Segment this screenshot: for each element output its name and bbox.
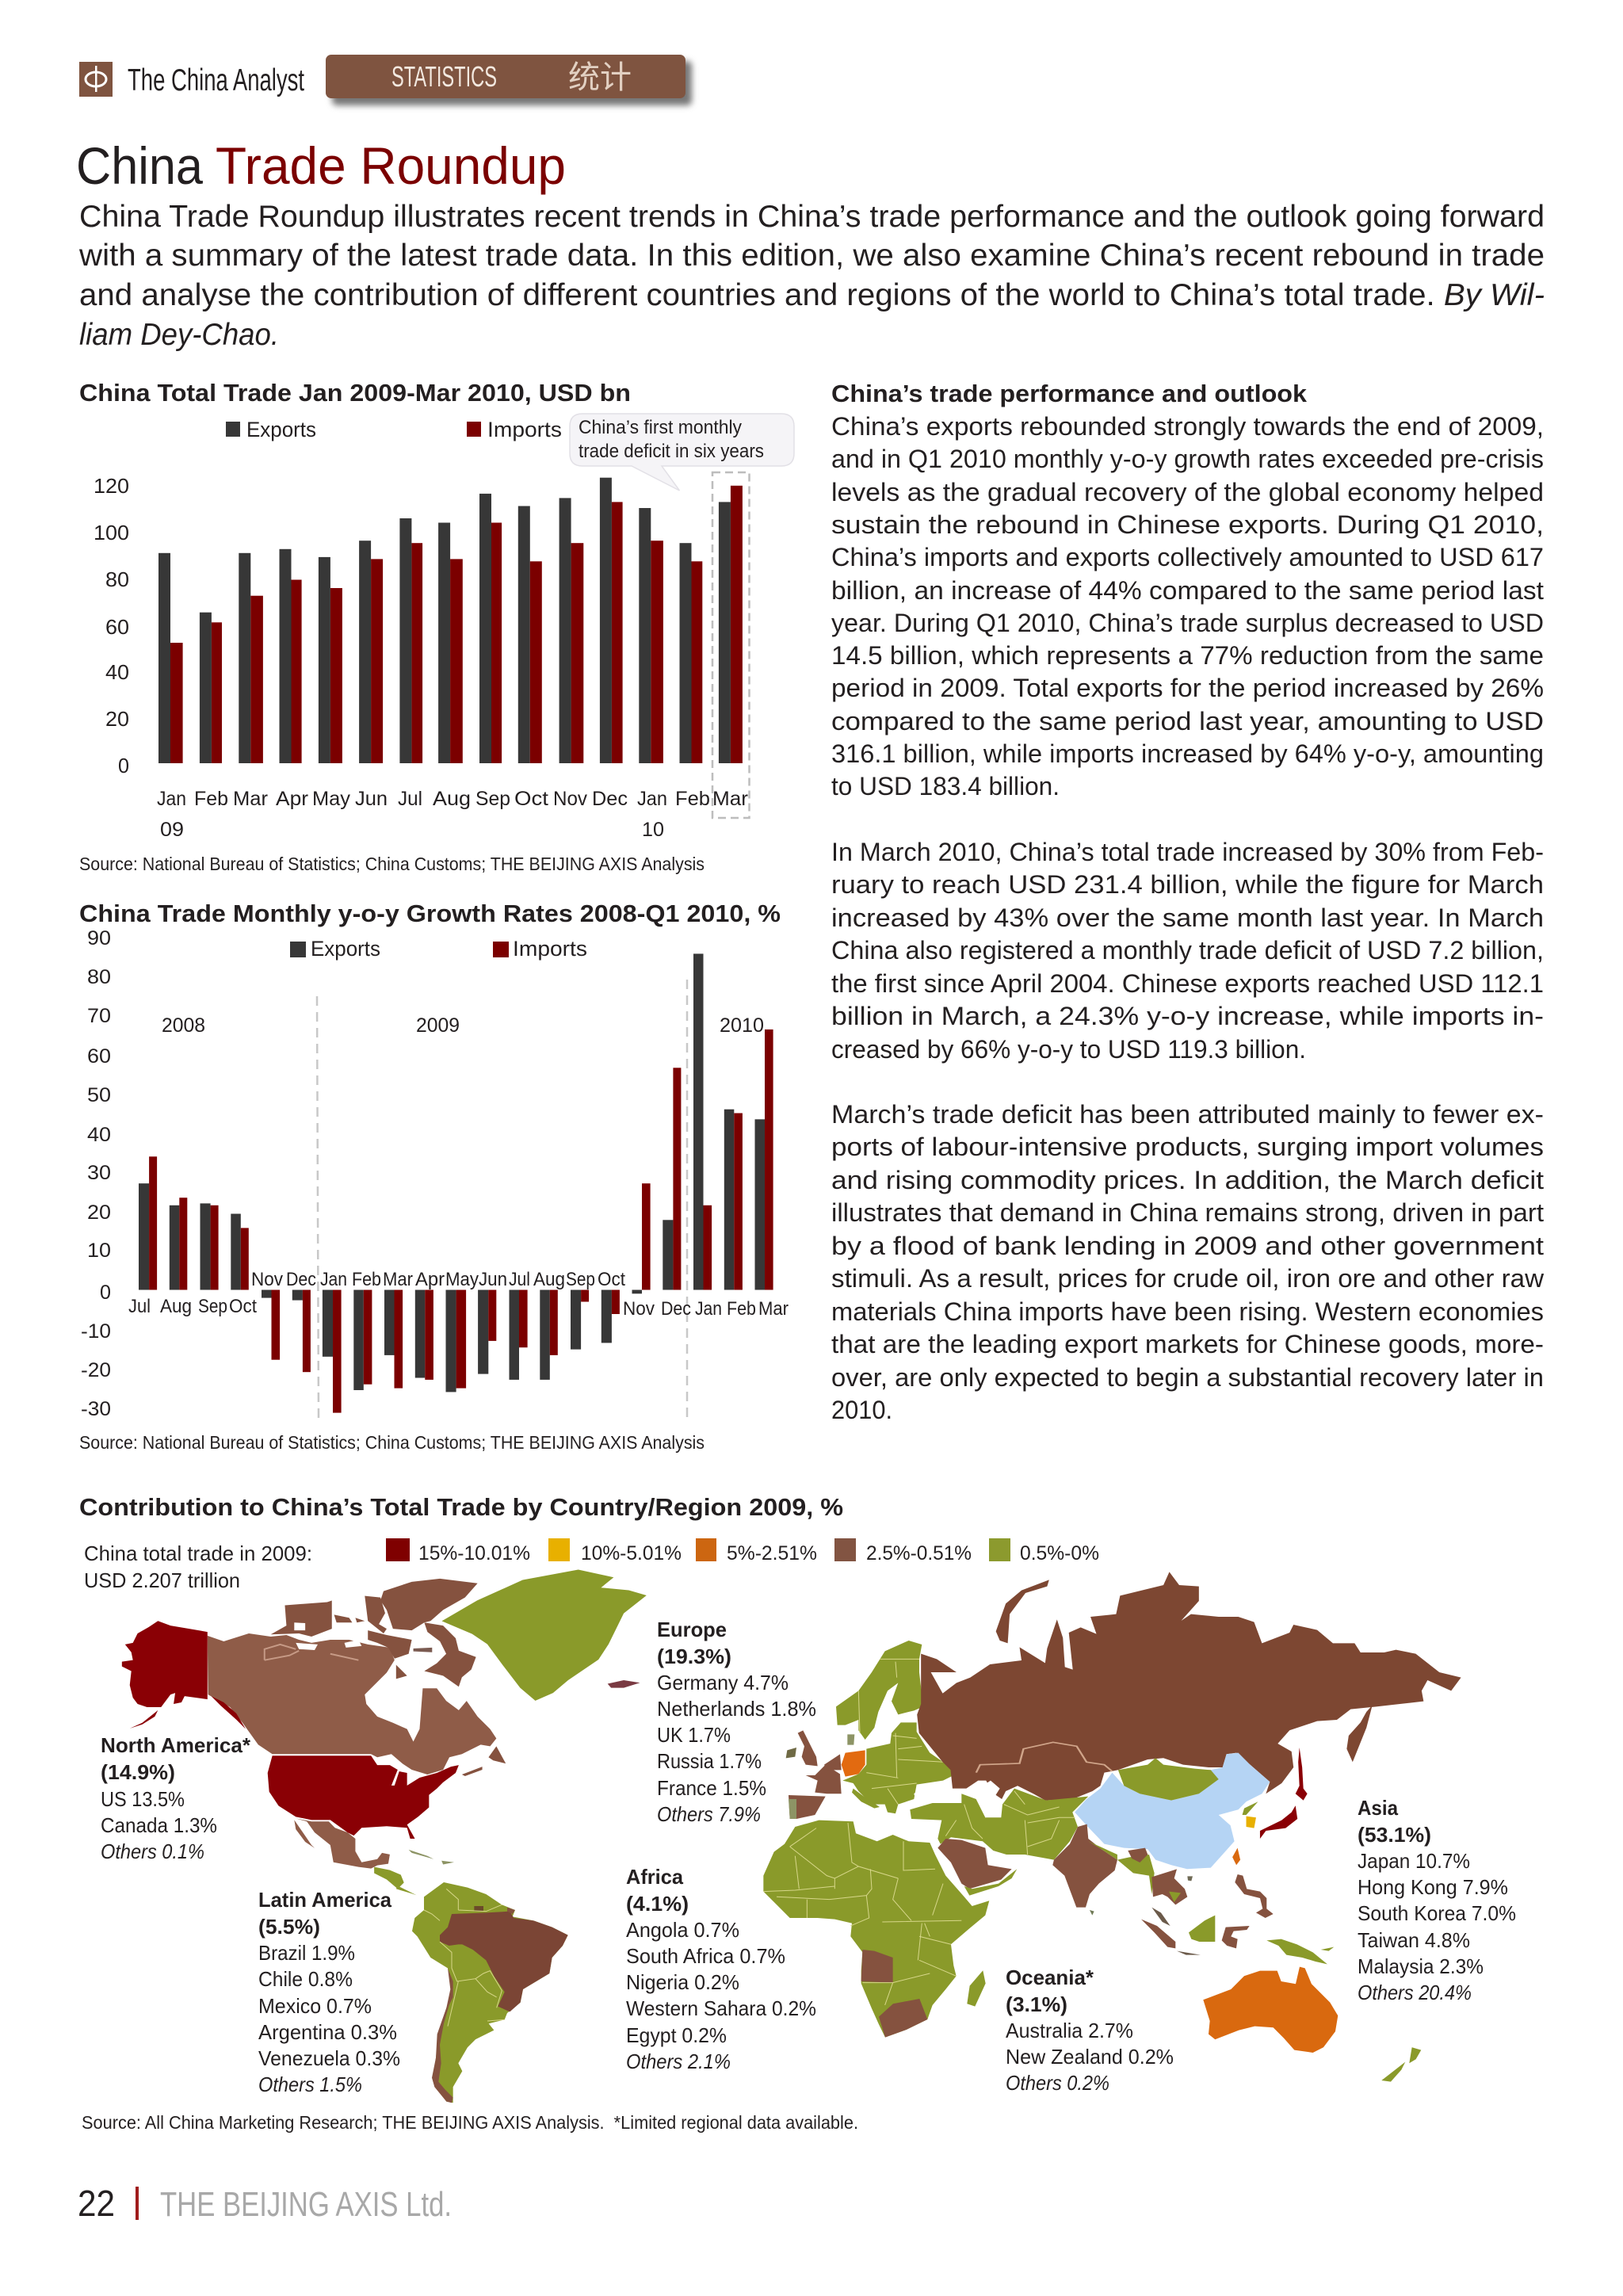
growth month labels: May: [445, 1269, 479, 1290]
x axis labels: Aug: [433, 788, 471, 810]
x axis labels: Mar: [712, 788, 748, 810]
map legend: 5%-2.51%: [727, 1542, 817, 1564]
growth month labels: Dec: [286, 1269, 316, 1290]
x axis labels: Jun: [355, 788, 388, 810]
article paragraph 1: billion, an increase of 44% compared to the same period last: [831, 576, 1544, 605]
chart legend: [226, 418, 562, 441]
growth month labels: Sep: [566, 1269, 595, 1290]
label: Europe: [657, 1618, 816, 1826]
article paragraph 1: 14.5 billion, which represents a 77% reduction from the same: [831, 641, 1544, 670]
y axis labels: 0: [118, 754, 129, 777]
source note: total trade: Source: National Bureau of Statistics; China Customs; THE BEIJING AXIS Analysis: [79, 854, 705, 874]
growth y axis labels: -10: [81, 1320, 111, 1343]
intro text: [78, 200, 1545, 352]
label: Africa: [626, 1865, 816, 2073]
growth month labels: Mar: [383, 1269, 413, 1290]
growth month labels: Oct: [229, 1296, 257, 1317]
label: Africa: (4.1%): [626, 1892, 689, 1916]
label: Asia: (53.1%): [1358, 1823, 1431, 1847]
growth month labels: Jul: [509, 1269, 530, 1290]
label: Europe: Germany 4.7%: [657, 1671, 789, 1694]
map: South America: [412, 1882, 568, 2103]
label: North America: [101, 1733, 251, 1863]
growth month labels: Jan: [695, 1298, 722, 1320]
label: Europe: Europe: [657, 1618, 727, 1641]
x axis labels: Mar: [233, 788, 268, 810]
growth y axis labels: 0: [100, 1282, 111, 1304]
label: North America: Others 0.1%: [101, 1839, 204, 1863]
article paragraph 3: stimuli. As a result, prices for crude oil, iron ore and other raw: [831, 1264, 1545, 1293]
label: North America: US 13.5%: [101, 1787, 185, 1811]
article paragraph 3: [831, 1100, 1545, 1424]
x axis labels: Feb: [675, 788, 710, 810]
source note: growth rates: Source: National Bureau of Statistics; China Customs; THE BEIJING AXIS Analysis: [79, 1432, 705, 1453]
section tab: statistics: [326, 55, 692, 105]
label: Latin America: Brazil 1.9%: [258, 1941, 355, 1965]
map: North America: [122, 1579, 506, 1895]
header: logo and magazine name: [79, 62, 304, 97]
article paragraph 1: [831, 412, 1544, 800]
intro text: liam Dey-Chao.: [79, 318, 279, 352]
label: North America: Canada 1.3%: [101, 1813, 217, 1837]
article paragraph 3: over, are only expected to begin a substantial recovery later in: [831, 1363, 1544, 1392]
x axis labels: Jan: [637, 788, 667, 810]
chart heading: total trade: China Total Trade Jan 2009-Mar 2010, USD bn: [79, 379, 631, 407]
y axis labels: 120: [94, 474, 129, 498]
intro text: China Trade Roundup illustrates recent trends in China’s trade performance and the outlook going forward: [79, 200, 1545, 234]
growth month labels: Jul: [128, 1296, 151, 1317]
article paragraph 3: 2010.: [831, 1396, 892, 1424]
article paragraph 2: the first since April 2004. Chinese exports reached USD 112.1: [831, 969, 1544, 998]
callout: first trade deficit: China’s first monthly: [579, 417, 742, 438]
x axis labels: May: [312, 788, 351, 810]
map legend: [386, 1538, 1099, 1564]
growth month labels: Aug: [160, 1296, 192, 1317]
x axis labels: Nov: [553, 788, 587, 810]
map: Southeast Asia and Oceania: [1117, 1848, 1421, 2082]
article paragraph 3: by a flood of bank lending in 2009 and other government: [831, 1232, 1544, 1260]
label: Africa: Angola 0.7%: [626, 1918, 739, 1942]
section tab: statistics: STATISTICS: [391, 60, 497, 93]
growth y axis labels: 50: [87, 1084, 111, 1106]
world map: [122, 1570, 1461, 2103]
label: Africa: Nigeria 0.2%: [626, 1970, 739, 1994]
year dividers: [317, 980, 687, 1419]
total trade note: [84, 1541, 312, 1592]
article paragraph 1: China’s exports rebounded strongly towards the end of 2009,: [831, 412, 1544, 441]
growth y axis labels: [81, 927, 111, 1420]
label: Latin America: Venezuela 0.3%: [258, 2046, 400, 2070]
label: Europe: Netherlands 1.8%: [657, 1697, 816, 1721]
growth y axis labels: 70: [87, 1005, 111, 1027]
label: Asia: Japan 10.7%: [1358, 1849, 1470, 1873]
growth month labels: [128, 1269, 789, 1320]
year labels: 2009: [416, 1014, 460, 1037]
label: Asia: Others 20.4%: [1358, 1981, 1472, 2004]
article paragraph 1: year. During Q1 2010, China’s trade surplus decreased to USD: [831, 609, 1544, 637]
label: Latin America: [258, 1888, 400, 2096]
label: Oceania: [1006, 1966, 1174, 2095]
total trade note: USD 2.207 trillion: [84, 1568, 240, 1592]
dashed highlight box: March 2010: [712, 472, 750, 818]
article paragraph 3: and rising commodity prices. In addition, the March deficit: [831, 1166, 1544, 1194]
map legend: 0.5%-0%: [1020, 1542, 1099, 1564]
article paragraph 1: and in Q1 2010 monthly y-o-y growth rates exceeded pre-crisis: [831, 445, 1544, 473]
y axis labels: 20: [105, 707, 129, 731]
label: Europe: France 1.5%: [657, 1776, 766, 1800]
growth month labels: Apr: [415, 1269, 445, 1290]
article paragraph 2: [831, 838, 1544, 1064]
article paragraph 3: March’s trade deficit has been attributed mainly to fewer ex-: [831, 1100, 1544, 1129]
label: Europe: Russia 1.7%: [657, 1749, 762, 1773]
label: Oceania: New Zealand 0.2%: [1006, 2045, 1174, 2069]
x axis labels: Sep: [475, 788, 510, 810]
growth month labels: Feb: [727, 1298, 756, 1320]
label: Oceania: Australia 2.7%: [1006, 2019, 1133, 2042]
y axis labels: 100: [94, 521, 129, 544]
label: Asia: Asia: [1358, 1796, 1398, 1820]
chart legend: Exports: [246, 418, 316, 441]
article paragraph 2: ruary to reach USD 231.4 billion, while the figure for March: [831, 870, 1544, 899]
label: Oceania: Oceania*: [1006, 1966, 1094, 1989]
growth y axis labels: 30: [87, 1162, 111, 1184]
section tab: statistics: 统计: [568, 60, 632, 95]
x axis labels: 10: [642, 819, 664, 841]
y axis labels: [94, 474, 129, 777]
footer: 22: [78, 2183, 115, 2224]
title: [76, 136, 566, 195]
chart heading: growth rates: China Trade Monthly y-o-y Growth Rates 2008-Q1 2010, %: [79, 900, 781, 927]
label: Asia: Hong Kong 7.9%: [1358, 1875, 1508, 1899]
growth y axis labels: 90: [87, 927, 111, 949]
map: Russia and Central Asia: [917, 1572, 1461, 1869]
bar chart: total trade: [94, 414, 794, 841]
map legend: 15%-10.01%: [418, 1542, 530, 1564]
article paragraph 1: levels as the gradual recovery of the global economy helped: [831, 478, 1544, 506]
y axis labels: 40: [105, 660, 129, 684]
footer: [78, 2183, 452, 2224]
growth month labels: Mar: [758, 1298, 789, 1320]
intro text: with a summary of the latest trade data. In this edition, we also examine China’s recent rebound in trade: [78, 239, 1545, 273]
map: Middle East and South Asia: [910, 1781, 1117, 1916]
label: Latin America: Latin America: [258, 1888, 392, 1912]
x axis labels: Jul: [398, 788, 422, 810]
article paragraph 1: sustain the rebound in Chinese exports. During Q1 2010,: [831, 510, 1544, 539]
year labels: [162, 1014, 764, 1037]
growth legend: Imports: [513, 937, 587, 961]
growth y axis labels: 20: [87, 1201, 111, 1224]
map legend: 2.5%-0.51%: [866, 1542, 972, 1564]
growth y axis labels: -30: [81, 1398, 111, 1420]
x axis labels: Apr: [276, 788, 308, 810]
x axis labels: Feb: [194, 788, 228, 810]
growth month labels: Feb: [352, 1269, 381, 1290]
year labels: 2010: [720, 1014, 764, 1037]
label: Asia: South Korea 7.0%: [1358, 1901, 1516, 1925]
label: North America: (14.9%): [101, 1760, 175, 1784]
map heading: Contribution to China’s Total Trade by Country/Region 2009, %: [79, 1493, 843, 1521]
growth month labels: Jun: [479, 1269, 507, 1290]
growth month labels: Nov: [251, 1269, 283, 1290]
label: Latin America: Chile 0.8%: [258, 1967, 353, 1991]
label: Asia: Taiwan 4.8%: [1358, 1928, 1470, 1952]
growth legend: Exports: [311, 937, 380, 961]
article paragraph 1: to USD 183.4 billion.: [831, 772, 1060, 800]
growth y axis labels: -20: [81, 1359, 111, 1381]
y axis labels: 80: [105, 567, 129, 591]
growth month labels: Oct: [598, 1269, 625, 1290]
year labels: 2008: [162, 1014, 205, 1037]
footer: THE BEIJING AXIS Ltd.: [160, 2185, 452, 2224]
callout: first trade deficit: trade deficit in six years: [579, 441, 764, 462]
source note: map: Source: All China Marketing Research; THE BEIJING AXIS Analysis. *Limited regional data available.: [82, 2112, 858, 2133]
label: Oceania: (3.1%): [1006, 1992, 1067, 2016]
map: Greenland and Iceland: [441, 1570, 647, 1701]
growth legend: [290, 937, 587, 961]
growth month labels: Jan: [320, 1269, 347, 1290]
map: Europe, Africa and Middle East: [763, 1641, 989, 2038]
article paragraph 1: China’s imports and exports collectively amounted to USD 617: [831, 543, 1544, 571]
label: Oceania: Others 0.2%: [1006, 2071, 1109, 2095]
x axis labels: [157, 788, 748, 841]
x axis labels: Oct: [514, 788, 548, 810]
chart legend: Imports: [487, 418, 562, 441]
article paragraph 3: illustrates that demand in China remains strong, driven in part: [831, 1198, 1544, 1227]
article paragraph 2: China also registered a monthly trade deficit of USD 7.2 billion,: [831, 936, 1544, 965]
title: Trade Roundup: [216, 136, 566, 195]
label: Latin America: Mexico 0.7%: [258, 1994, 372, 2018]
article paragraph 1: compared to the same period last year, amounting to USD: [831, 707, 1544, 735]
label: Africa: Egypt 0.2%: [626, 2023, 727, 2047]
article paragraph 1: period in 2009. Total exports for the period increased by 26%: [831, 674, 1544, 702]
growth y axis labels: 10: [87, 1240, 111, 1262]
total trade note: China total trade in 2009:: [84, 1541, 312, 1565]
article heading: China’s trade performance and outlook: [831, 380, 1308, 407]
article paragraph 3: that are the leading export markets for Chinese goods, more-: [831, 1330, 1544, 1358]
label: Asia: Malaysia 2.3%: [1358, 1954, 1484, 1978]
growth month labels: Aug: [533, 1269, 565, 1290]
label: Africa: Africa: [626, 1865, 684, 1889]
growth y axis labels: 40: [87, 1124, 111, 1146]
map legend: 10%-5.01%: [581, 1542, 682, 1564]
bar chart: growth rates: [81, 927, 789, 1420]
label: Africa: South Africa 0.7%: [626, 1944, 785, 1968]
article paragraph 3: ports of labour-intensive products, surging import volumes: [831, 1133, 1544, 1161]
header: logo and magazine name: The China Analyst: [128, 63, 304, 97]
article paragraph 3: materials China imports have been rising. Western economies: [831, 1297, 1544, 1326]
callout: first trade deficit: [570, 414, 794, 491]
bars: [158, 478, 743, 763]
label: Europe: UK 1.7%: [657, 1723, 731, 1747]
article paragraph 2: billion in March, a 24.3% y-o-y increase, while imports in-: [831, 1002, 1544, 1030]
label: Asia: [1358, 1796, 1516, 2004]
label: North America: North America*: [101, 1733, 251, 1757]
label: Latin America: (5.5%): [258, 1915, 320, 1939]
x axis labels: Jan: [157, 788, 186, 810]
x axis labels: Dec: [592, 788, 628, 810]
y axis labels: 60: [105, 615, 129, 639]
growth month labels: Nov: [623, 1298, 655, 1320]
label: Africa: Western Sahara 0.2%: [626, 1996, 816, 2020]
growth month labels: Sep: [198, 1296, 227, 1317]
article paragraph 1: 316.1 billion, while imports increased by 64% y-o-y, amounting: [831, 739, 1544, 768]
article paragraph 2: In March 2010, China’s total trade increased by 30% from Feb-: [831, 838, 1544, 866]
intro text: and analyse the contribution of different countries and regions of the world to China’s total trade. By Wil-: [79, 278, 1545, 312]
article paragraph 2: increased by 43% over the same month last year. In March: [831, 904, 1544, 932]
label: Africa: Others 2.1%: [626, 2050, 731, 2073]
x axis labels: 09: [160, 819, 184, 841]
label: Latin America: Others 1.5%: [258, 2073, 362, 2096]
growth month labels: Dec: [661, 1298, 691, 1320]
title: China: [76, 136, 203, 195]
label: Latin America: Argentina 0.3%: [258, 2020, 397, 2044]
label: Europe: (19.3%): [657, 1645, 731, 1668]
growth bars: [139, 953, 773, 1413]
growth y axis labels: 60: [87, 1045, 111, 1068]
growth y axis labels: 80: [87, 966, 111, 988]
article: trade performance and outlook: [831, 380, 1545, 1424]
article paragraph 2: creased by 66% y-o-y to USD 119.3 billion.: [831, 1035, 1306, 1064]
label: Europe: Others 7.9%: [657, 1802, 761, 1826]
